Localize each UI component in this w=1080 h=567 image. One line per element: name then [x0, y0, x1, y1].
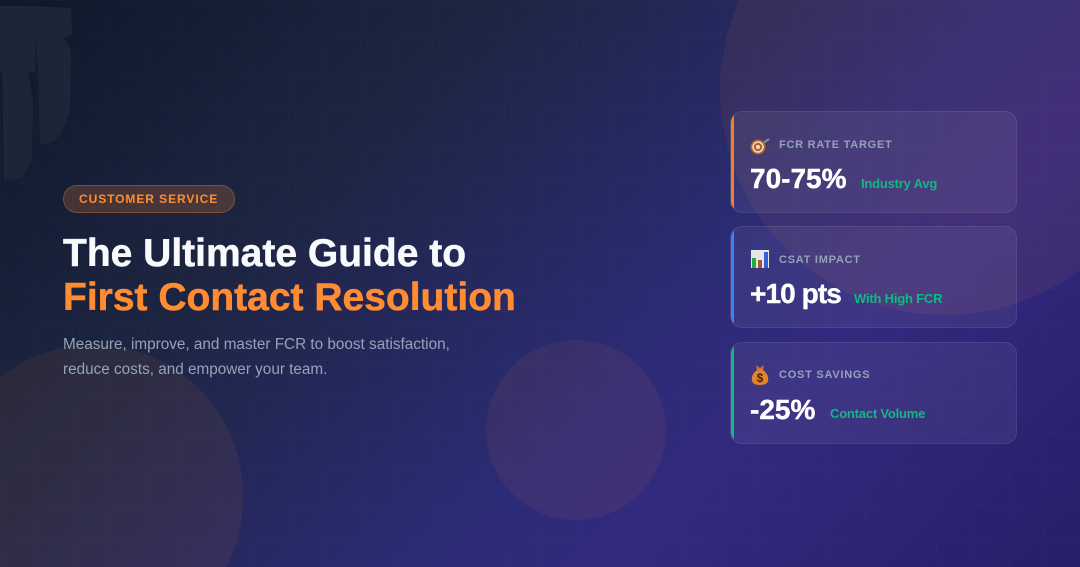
card accent	[730, 226, 734, 328]
icon: bar chart	[751, 250, 769, 268]
card: CSAT impact	[730, 226, 1017, 328]
title	[63, 232, 516, 319]
value: -25%	[750, 394, 815, 425]
value: +10 pts	[750, 278, 841, 309]
icon: target	[750, 138, 770, 154]
subtitle: Measure, improve, and master FCR to boost satisfaction,	[63, 336, 450, 353]
value: 70-75%	[750, 163, 847, 194]
decorative circle: center	[486, 340, 666, 520]
subtitle: reduce costs, and empower your team.	[63, 361, 327, 378]
title line 1: The Ultimate Guide to	[63, 232, 466, 275]
card accent	[730, 342, 734, 444]
decorative circle: bottom left	[0, 345, 243, 567]
icon: money bag: $	[757, 371, 764, 385]
label: COST SAVINGS	[779, 369, 870, 381]
icon: money bag	[752, 365, 768, 385]
note: Contact Volume	[830, 406, 925, 421]
note: With High FCR	[854, 291, 942, 306]
card: cost savings	[730, 342, 1017, 444]
label: CSAT IMPACT	[779, 254, 861, 266]
card: FCR rate target	[730, 111, 1017, 213]
note: Industry Avg	[861, 176, 937, 191]
decorative circle: top right	[720, 0, 1080, 315]
subtitle	[63, 336, 450, 378]
badge: customer service: CUSTOMER SERVICE	[79, 192, 218, 206]
label: FCR RATE TARGET	[779, 139, 892, 151]
decorative brush shape: top left	[0, 6, 72, 180]
card accent	[730, 111, 734, 213]
title line 2: First Contact Resolution	[63, 276, 516, 319]
badge: customer service	[63, 185, 235, 213]
